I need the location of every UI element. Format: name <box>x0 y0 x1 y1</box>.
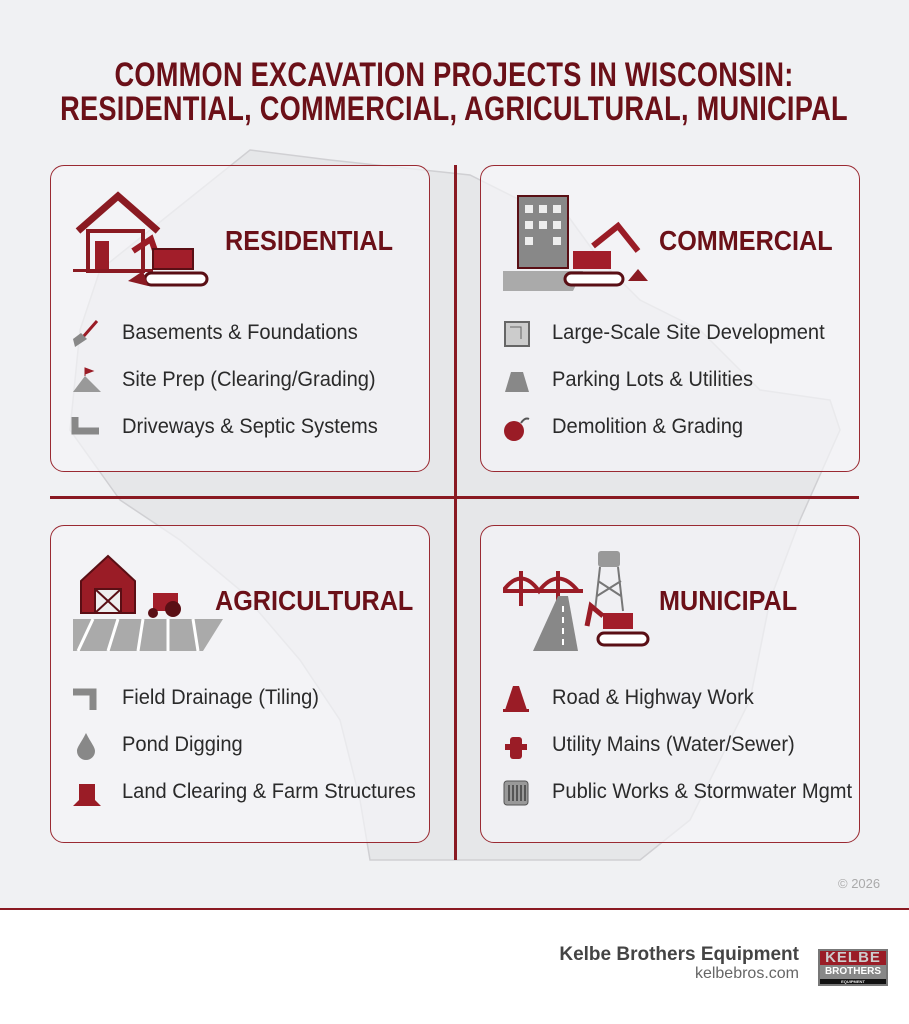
item: public works: Public Works & Stormwater Mgmt <box>552 779 852 803</box>
icon: barn and tractor <box>73 554 223 652</box>
item: field drainage: Field Drainage (Tiling) <box>122 685 319 709</box>
footer brand text <box>559 944 799 982</box>
footer brand text: Kelbe Brothers Equipment <box>559 944 799 965</box>
panel: residential <box>50 165 430 472</box>
item: demolition: Demolition & Grading <box>552 414 743 438</box>
item: land clearing: Land Clearing & Farm Structures <box>122 779 416 803</box>
item: site prep: Site Prep (Clearing/Grading) <box>122 367 376 391</box>
item: road work: Road & Highway Work <box>552 685 754 709</box>
logo <box>818 949 888 986</box>
logo: KELBE <box>825 949 881 966</box>
heading: commercial: COMMERCIAL <box>659 225 833 256</box>
logo: EQUIPMENT <box>841 979 865 984</box>
copyright: © 2026 <box>838 876 880 891</box>
item: site development: Large-Scale Site Development <box>552 320 825 344</box>
footer brand text: kelbebros.com <box>695 965 799 982</box>
heading: agricultural: AGRICULTURAL <box>215 585 413 616</box>
heading: municipal: MUNICIPAL <box>659 585 797 616</box>
title: RESIDENTIAL, COMMERCIAL, AGRICULTURAL, MUNICIPAL <box>60 90 848 128</box>
item: pond digging: Pond Digging <box>122 732 243 756</box>
item: pond digging <box>77 732 243 760</box>
icon: bridge, road, tower, excavator <box>503 551 650 651</box>
divider lines <box>454 165 457 860</box>
item: parking lots: Parking Lots & Utilities <box>552 367 753 391</box>
logo: BROTHERS <box>825 966 881 977</box>
icon: house with excavator <box>73 192 208 286</box>
title <box>60 56 848 128</box>
footer line <box>0 908 909 910</box>
panel: commercial <box>480 165 860 472</box>
item: basements: Basements & Foundations <box>122 320 358 344</box>
item: utility mains: Utility Mains (Water/Sewer) <box>552 732 795 756</box>
heading: residential: RESIDENTIAL <box>225 225 393 256</box>
title: COMMON EXCAVATION PROJECTS IN WISCONSIN: <box>114 56 794 94</box>
panel: agricultural <box>50 525 430 843</box>
icon: building and excavator <box>503 195 648 291</box>
panel: municipal <box>480 525 860 843</box>
item: driveways: Driveways & Septic Systems <box>122 414 378 438</box>
